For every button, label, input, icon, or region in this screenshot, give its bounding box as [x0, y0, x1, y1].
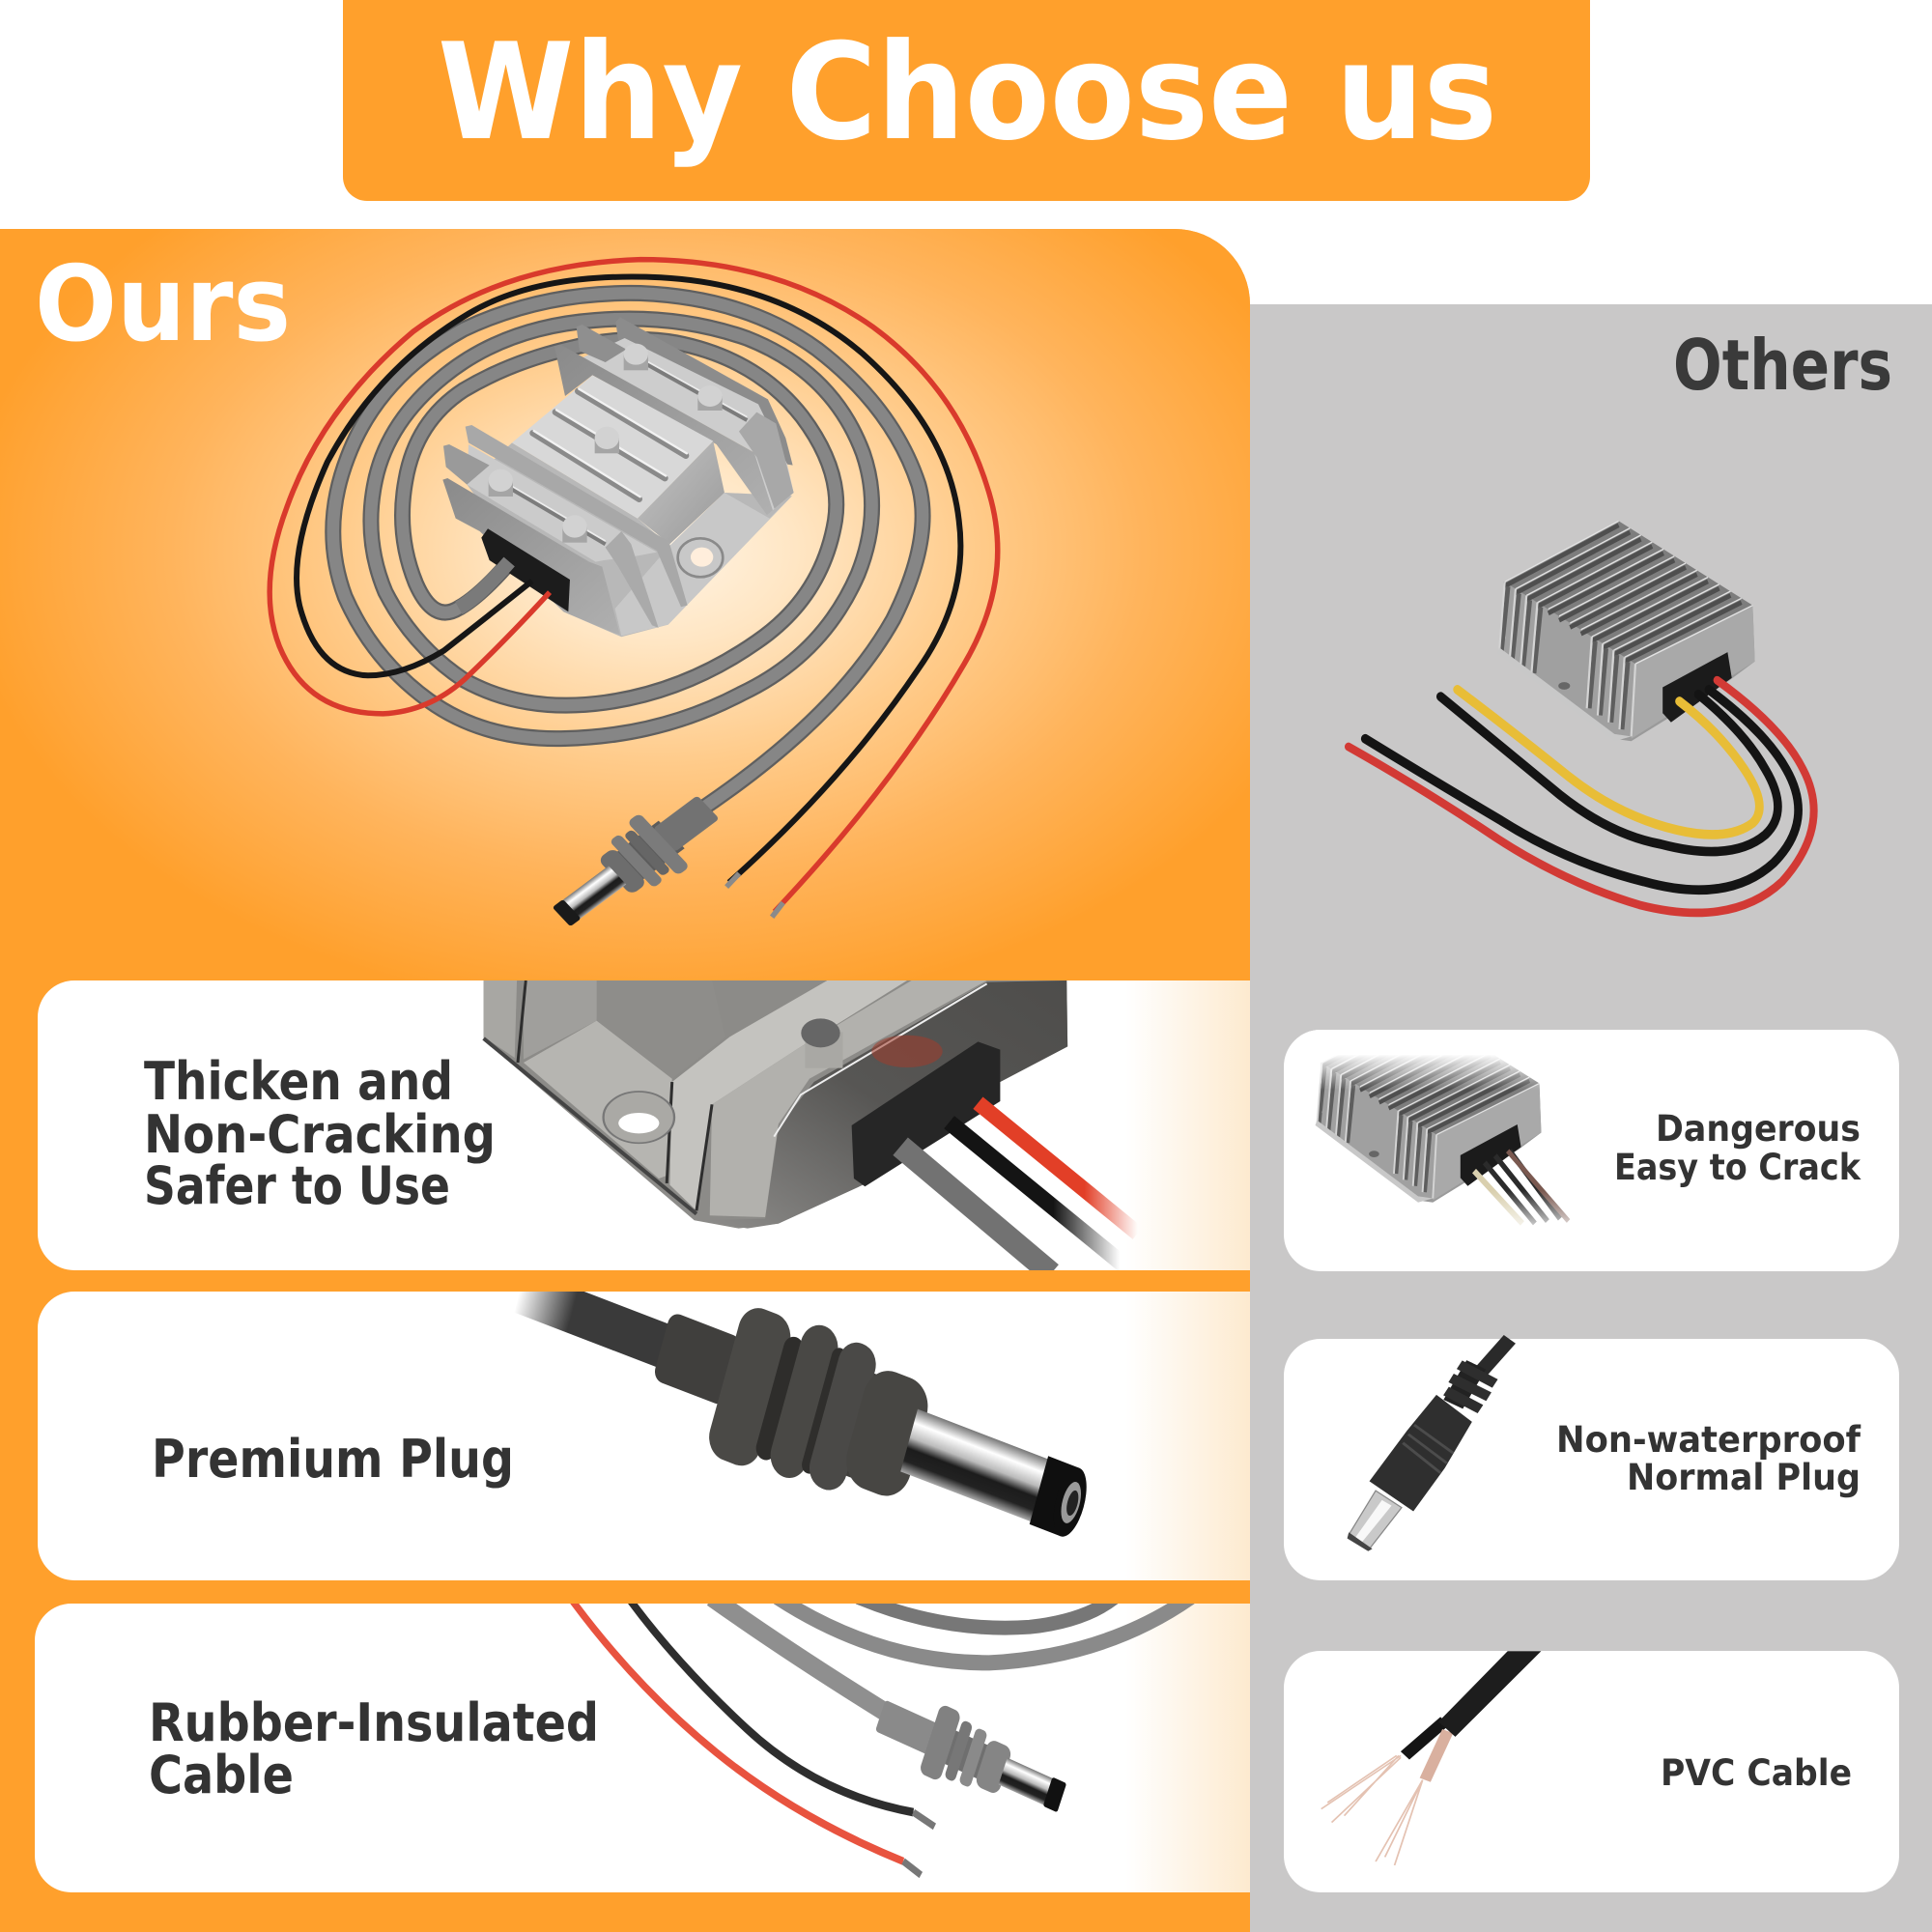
normal DC plug image: [1348, 1339, 1510, 1551]
rear middle fin: [577, 325, 626, 362]
black wire inner: [1440, 695, 1777, 852]
normal plug text: Non-waterproof: [1556, 1419, 1861, 1461]
card 1 text: Safer to Use: [144, 1155, 450, 1216]
close-up of rubber cable and plug: [570, 1597, 1191, 1875]
heading: Others: Others: [1673, 325, 1892, 406]
card 1 text: [144, 1051, 496, 1216]
close-up of premium plug: [516, 1292, 1087, 1537]
yellow wire: [1458, 690, 1759, 835]
card: thicken and non-cracking: [38, 980, 1250, 1273]
others product: finned converter with wires: [1349, 521, 1814, 913]
panel: others background: [1250, 304, 1932, 1932]
front top surface: [467, 444, 657, 562]
hero glow background: [0, 229, 1250, 980]
aluminium module: [442, 317, 794, 637]
card 1 text: Thicken and: [144, 1051, 453, 1112]
card 2 text: Premium Plug: [152, 1429, 514, 1490]
comparison card: normal plug: [1284, 1339, 1899, 1580]
front middle fin: [443, 444, 490, 485]
black wire outer: [1365, 690, 1799, 890]
normal plug text: [1556, 1419, 1861, 1498]
panel: ours: [0, 229, 1250, 1932]
PVC text: PVC Cable: [1661, 1752, 1852, 1794]
comparison card: PVC cable: [1284, 1651, 1899, 1892]
wire tips: [726, 873, 783, 917]
mounting flange: [615, 493, 792, 636]
title banner: [343, 0, 1590, 201]
faded converter image: [1300, 1030, 1571, 1225]
rear inner fin: [554, 345, 773, 515]
mounting hole: [678, 538, 723, 577]
front plate fin: [442, 478, 620, 635]
pins: [489, 344, 723, 543]
card 1 text: Non-Cracking: [144, 1104, 496, 1165]
front inner fin: [466, 425, 688, 607]
rear outer fin: [615, 317, 793, 466]
title text: Why Choose us: [438, 14, 1497, 170]
close-up of module corner: [484, 980, 1138, 1273]
normal plug text: Normal Plug: [1627, 1457, 1861, 1498]
wires and plug: [270, 260, 998, 944]
red wire: [1349, 680, 1814, 913]
hero product: waterproof converter with coiled cables: [270, 260, 998, 944]
card 3 text: [149, 1692, 599, 1805]
finned box: [1497, 521, 1755, 741]
central top surface: [512, 375, 713, 519]
dangerous text: Dangerous: [1656, 1108, 1861, 1150]
red wire: [270, 260, 998, 912]
dangerous text: [1614, 1108, 1861, 1188]
black wire: [297, 277, 960, 882]
card: rubber-insulated cable: [35, 1597, 1250, 1892]
card 3 text: Cable: [149, 1745, 294, 1805]
coiled gray cable: [333, 293, 923, 812]
heading: Ours: Ours: [35, 244, 291, 365]
DC plug: [536, 781, 734, 944]
comparison card: dangerous: [1284, 1009, 1899, 1271]
PVC cable image: [1321, 1651, 1541, 1865]
card: premium plug: [38, 1292, 1250, 1580]
end wall: [638, 441, 724, 544]
rear top surface: [582, 338, 794, 515]
card 3 text: Rubber-Insulated: [149, 1692, 599, 1753]
gray cable exit from grommet: [459, 562, 509, 608]
grommet: [481, 528, 570, 611]
dangerous text: Easy to Crack: [1614, 1147, 1861, 1188]
